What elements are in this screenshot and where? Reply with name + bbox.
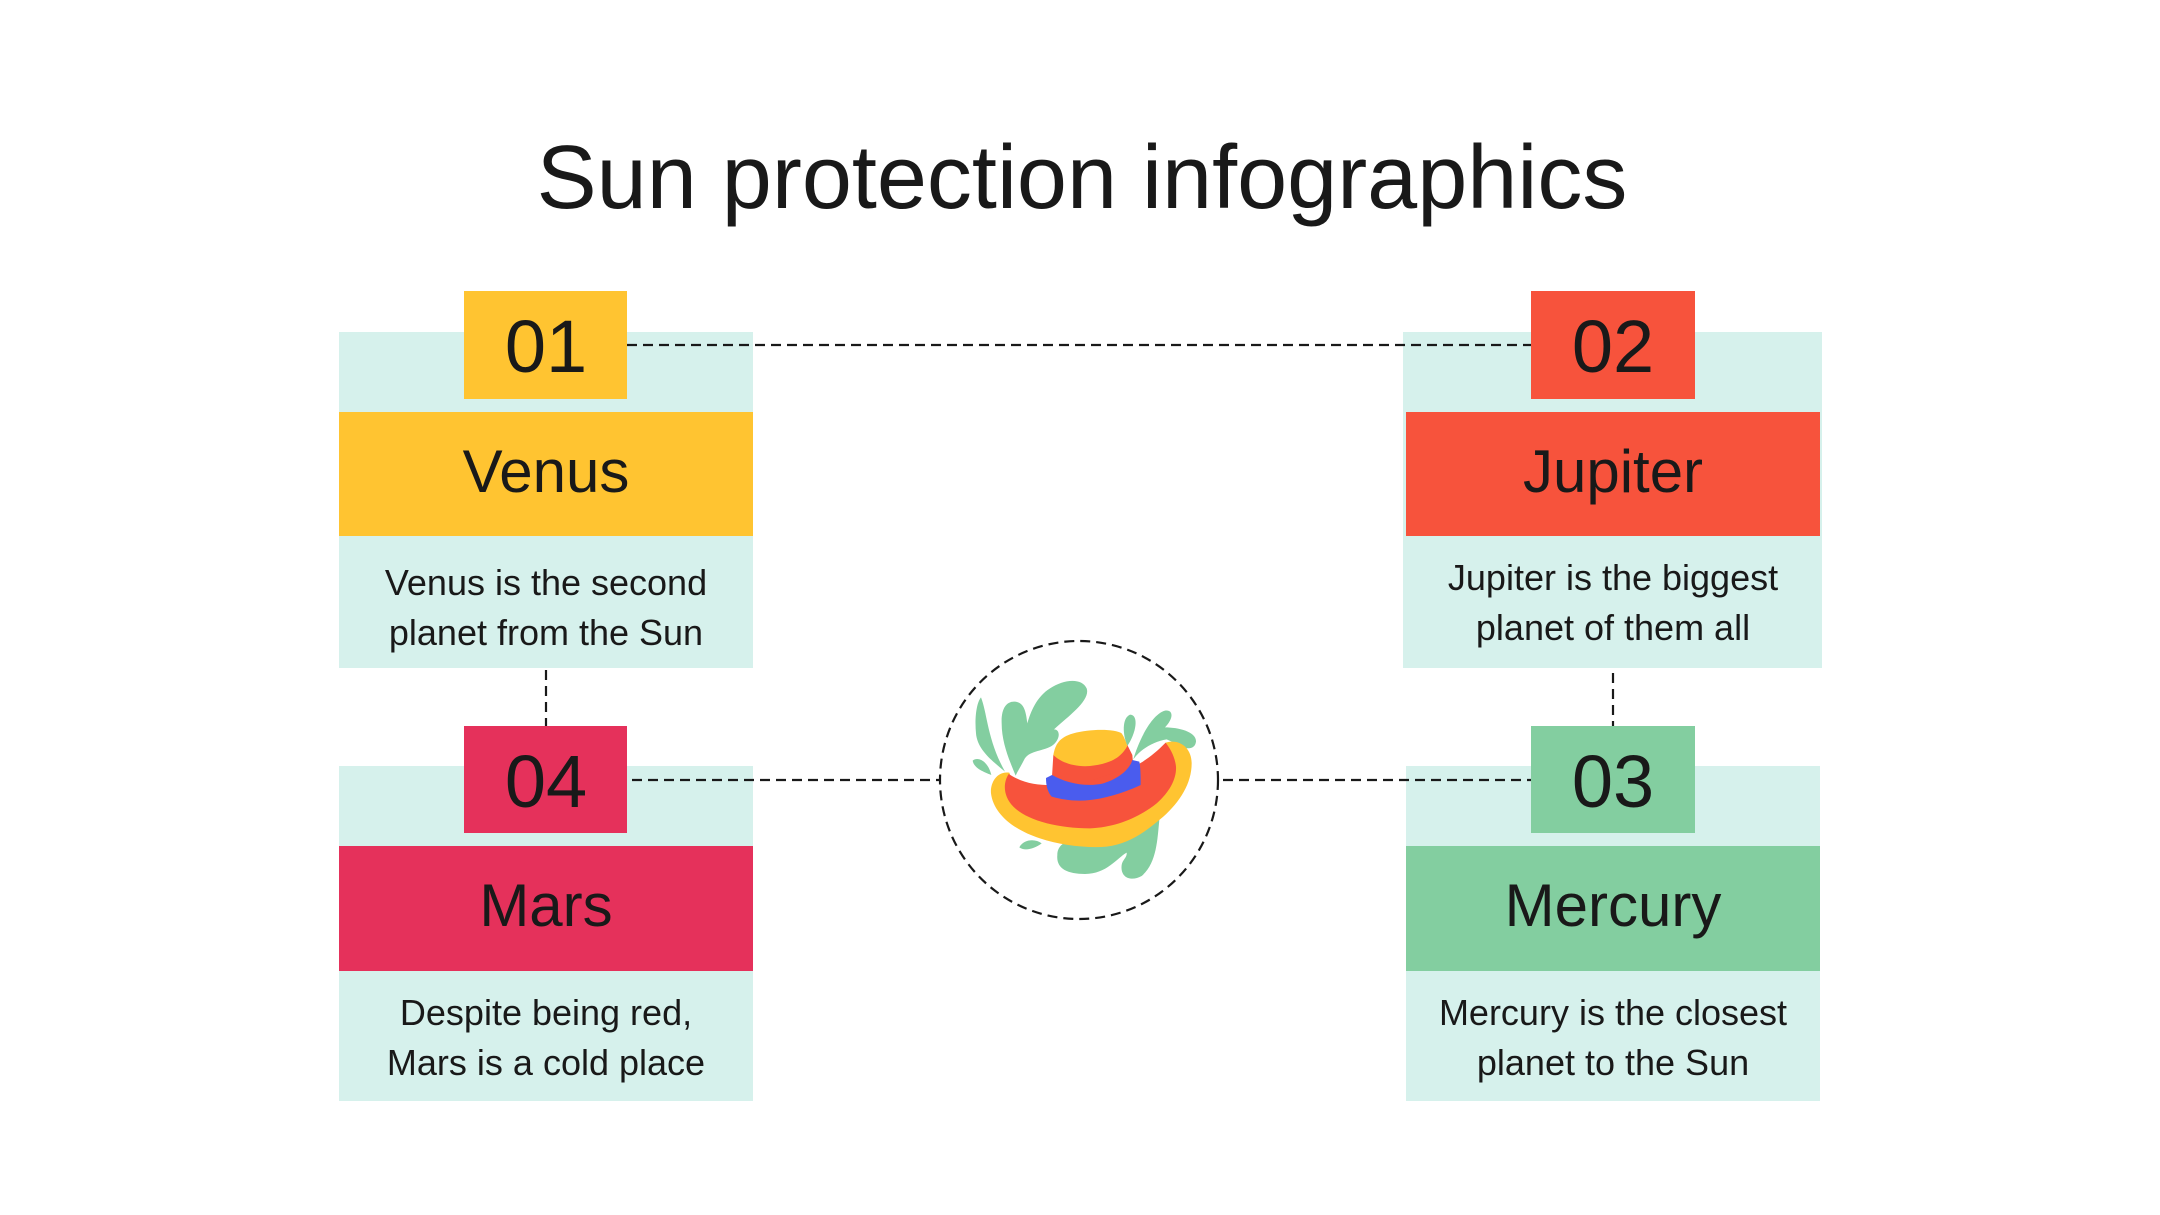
icon: sun hat with leaves	[973, 681, 1196, 879]
connector: 01 to 04	[545, 670, 547, 726]
mercury name band	[1406, 846, 1820, 971]
number badge 03	[1531, 726, 1695, 833]
jupiter name band	[1406, 412, 1820, 536]
connector: 04 to circle	[632, 779, 940, 781]
dashed circle	[940, 641, 1218, 919]
mars description: Despite being red,	[400, 992, 692, 1033]
jupiter name: Jupiter	[1523, 438, 1703, 505]
panel: mercury	[1406, 766, 1820, 1101]
number badge 03: 03	[1572, 740, 1654, 823]
connector: circle to 03	[1223, 779, 1531, 781]
venus description: planet from the Sun	[389, 612, 703, 653]
title: Sun protection infographics	[537, 128, 1627, 228]
number badge 01: 01	[505, 305, 587, 388]
number badge 01	[464, 291, 627, 399]
number badge 02	[1531, 291, 1695, 399]
venus description: Venus is the second	[385, 562, 707, 603]
mars description: Mars is a cold place	[387, 1042, 705, 1083]
mercury description: planet to the Sun	[1477, 1042, 1749, 1083]
mercury description: Mercury is the closest	[1439, 992, 1787, 1033]
panel: venus	[339, 332, 753, 668]
mars name band	[339, 846, 753, 971]
jupiter description: planet of them all	[1476, 607, 1750, 648]
panel: mars	[339, 766, 753, 1101]
jupiter description: Jupiter is the biggest	[1448, 557, 1778, 598]
connector: 02 to 03	[1612, 673, 1614, 726]
number badge 02: 02	[1572, 305, 1654, 388]
mars name: Mars	[479, 872, 613, 939]
venus name: Venus	[463, 438, 629, 505]
number badge 04: 04	[505, 740, 587, 823]
number badge 04	[464, 726, 627, 833]
mercury name: Mercury	[1505, 872, 1721, 939]
panel: jupiter	[1403, 332, 1822, 668]
venus name band	[339, 412, 753, 536]
connector: 01 to 02	[627, 344, 1531, 346]
